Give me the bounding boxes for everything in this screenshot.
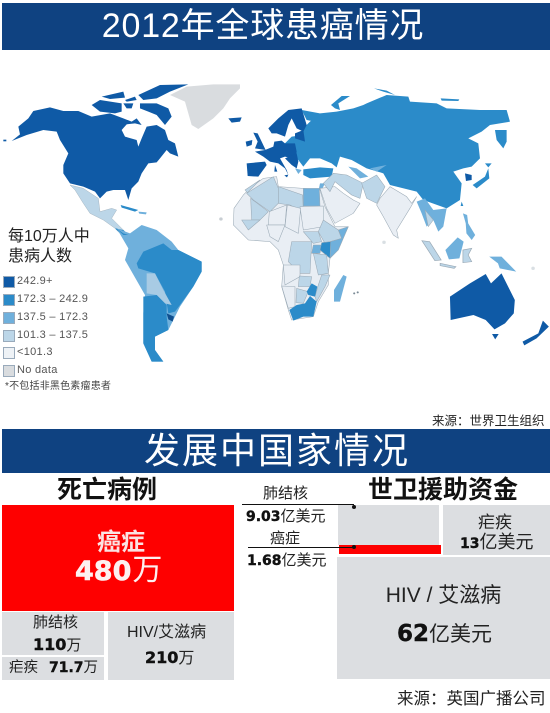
cell: HIV funding bbox=[337, 557, 550, 679]
cell: tuberculosis funding bbox=[338, 505, 439, 545]
map: Fiji bbox=[531, 267, 535, 270]
map: Greece bbox=[295, 168, 302, 174]
map: Cape Verde bbox=[219, 217, 223, 221]
map: Taiwan bbox=[461, 202, 463, 206]
legend item: <101.3 bbox=[3, 346, 53, 359]
map: Philippines bbox=[463, 213, 475, 240]
legend item: <101.3: <101.3 bbox=[17, 346, 53, 358]
map: Southeast Asia bbox=[417, 198, 447, 232]
cell: cancer deaths bbox=[2, 505, 234, 611]
map: New Guinea bbox=[489, 257, 516, 272]
map: Novaya Zemlya bbox=[331, 96, 350, 110]
cancer value: 480万 bbox=[75, 554, 162, 587]
callout value: 9.03亿美元 bbox=[246, 508, 326, 525]
HIV label: HIV/艾滋病 bbox=[127, 624, 206, 641]
map: Sumatra bbox=[422, 241, 441, 261]
cell: malaria deaths bbox=[2, 657, 104, 680]
HIV funding value: 62亿美元 bbox=[397, 621, 492, 647]
map: Asia-Pacific bbox=[219, 213, 549, 345]
map: India bbox=[377, 187, 417, 238]
callout dot bbox=[352, 545, 356, 549]
map: South Africa bbox=[289, 296, 317, 321]
HIV funding label: HIV / 艾滋病 bbox=[386, 584, 501, 607]
callout: tuberculosis funding bbox=[242, 485, 356, 525]
map: Finland region bbox=[302, 110, 320, 122]
legend item: 101.3 – 137.5: 101.3 – 137.5 bbox=[17, 329, 88, 341]
legend item: 172.3 – 242.9: 172.3 – 242.9 bbox=[17, 293, 88, 305]
map: Indian Ocean islands bbox=[353, 291, 359, 294]
map: Uganda bbox=[312, 245, 322, 253]
map: Cuba bbox=[121, 205, 138, 212]
callout label: 癌症 bbox=[270, 530, 300, 547]
map: Scandinavia bbox=[268, 108, 307, 137]
map: Mali bbox=[251, 198, 268, 220]
map: Ireland bbox=[246, 140, 252, 147]
title banner bbox=[2, 3, 550, 50]
cell: HIV deaths bbox=[108, 612, 234, 680]
map: Mexico bbox=[70, 185, 128, 237]
HIV value: 210万 bbox=[145, 648, 194, 667]
map: Zambia bbox=[298, 276, 312, 287]
malaria value: 71.7万 bbox=[49, 660, 98, 676]
map: continent base bbox=[117, 225, 202, 362]
map: Turkey bbox=[303, 167, 333, 178]
malaria label: 疟疾 bbox=[9, 660, 38, 676]
map: Europe bbox=[246, 108, 325, 192]
map: Niger bbox=[268, 205, 287, 225]
map: Tasmania bbox=[492, 334, 499, 339]
map: Japan bbox=[485, 163, 492, 167]
map: Balkans bbox=[285, 153, 298, 168]
map: Sulawesi bbox=[463, 248, 472, 263]
malaria funding label: 疟疾 bbox=[478, 513, 512, 532]
legend item: No data bbox=[3, 364, 58, 377]
map: Canada and USA bbox=[3, 84, 188, 200]
map: Australia bbox=[450, 273, 515, 329]
map: Afghanistan and Pakistan bbox=[362, 175, 385, 203]
map: Baltics bbox=[295, 130, 305, 142]
cell: malaria funding bbox=[443, 505, 550, 555]
map: Great Britain bbox=[253, 133, 266, 150]
map: Korea bbox=[465, 173, 472, 181]
map: Sardinia bbox=[274, 165, 277, 172]
map: Egypt bbox=[303, 188, 320, 206]
map: Libya bbox=[278, 187, 303, 212]
map: Greenland bbox=[170, 84, 240, 129]
map: Central Asia bbox=[348, 167, 368, 178]
cell: cancer funding bbox=[339, 545, 441, 554]
callout label: 肺结核 bbox=[263, 485, 308, 502]
title: 2012年全球患癌情况 bbox=[102, 7, 424, 45]
map: Uruguay bbox=[167, 313, 174, 322]
callout leader line bbox=[248, 547, 354, 548]
map: Mozambique bbox=[315, 275, 330, 302]
map: Africa base bbox=[233, 177, 348, 320]
world map bbox=[3, 84, 549, 362]
map: Eurasia bbox=[228, 88, 510, 208]
map: Botswana bbox=[296, 288, 308, 303]
map: Levant bbox=[318, 183, 325, 192]
map: Chad bbox=[285, 205, 301, 233]
map: Caribbean islands bbox=[138, 212, 147, 214]
deaths heading: 死亡病例 bbox=[57, 476, 157, 504]
map: Zimbabwe bbox=[307, 283, 317, 297]
map: Somalia bbox=[330, 227, 348, 258]
map: Nigeria bbox=[267, 225, 285, 242]
map source: 来源：世界卫生组织 bbox=[432, 410, 545, 429]
map: Iceland bbox=[228, 117, 242, 123]
map: Iran and Iraq bbox=[323, 173, 363, 198]
map: Western and Central Europe bbox=[255, 141, 297, 175]
map: Java bbox=[440, 263, 456, 268]
map: West Africa bbox=[242, 220, 260, 230]
legend item: 242.9+: 242.9+ bbox=[17, 275, 53, 287]
map: Arabia bbox=[320, 187, 360, 223]
map: South Sudan bbox=[303, 232, 322, 243]
treemap: deaths bbox=[2, 505, 234, 680]
map: Kamchatka bbox=[495, 130, 507, 148]
map: Middle East and South Asia bbox=[320, 165, 447, 238]
map: Africa bbox=[233, 177, 348, 321]
map: Borneo bbox=[445, 237, 464, 259]
map: Tanzania bbox=[313, 253, 328, 275]
map: Russia and China bbox=[283, 95, 510, 208]
aid heading: 世卫援助资金 bbox=[368, 476, 518, 504]
legend bbox=[3, 227, 111, 392]
legend item: 242.9+ bbox=[3, 275, 53, 288]
cell: tuberculosis deaths bbox=[2, 612, 104, 655]
tuberculosis label: 肺结核 bbox=[33, 614, 78, 631]
aid source: 来源：英国广播公司 bbox=[397, 685, 546, 709]
map: Brazil bbox=[137, 243, 202, 313]
malaria funding value: 13亿美元 bbox=[460, 532, 533, 552]
legend title: 每10万人中 bbox=[8, 228, 90, 245]
map: Spain bbox=[247, 162, 267, 177]
callout leader line bbox=[242, 504, 354, 505]
tuberculosis value: 110万 bbox=[33, 635, 81, 654]
legend title bbox=[8, 227, 90, 265]
map: Sri Lanka bbox=[382, 241, 386, 244]
legend item: 137.5 – 172.3: 137.5 – 172.3 bbox=[17, 311, 88, 323]
legend footnote: *不包括非黑色素瘤患者 bbox=[5, 381, 111, 392]
map: Namibia bbox=[282, 286, 295, 308]
map: Central America bbox=[115, 228, 128, 237]
legend title: 患病人数 bbox=[8, 248, 72, 265]
cancer label: 癌症 bbox=[97, 529, 145, 556]
map: North America bbox=[3, 84, 240, 237]
callout dot bbox=[352, 505, 356, 509]
map: Morocco bbox=[245, 180, 260, 193]
callout: cancer funding bbox=[247, 530, 356, 569]
treemap: aid funding bbox=[337, 505, 550, 679]
map: Angola bbox=[283, 265, 300, 285]
map: Argentina and Chile bbox=[143, 295, 168, 362]
map: DR Congo bbox=[288, 242, 312, 273]
map: Kenya bbox=[320, 242, 331, 258]
map: Thailand bbox=[425, 210, 433, 227]
legend item: No data: No data bbox=[17, 364, 58, 376]
map: Ethiopia bbox=[318, 220, 342, 243]
map: Ukraine and Belarus bbox=[293, 137, 315, 163]
developing countries banner bbox=[2, 429, 550, 473]
map: Madagascar bbox=[334, 275, 347, 302]
map: Central America tip bbox=[115, 227, 128, 235]
map: Arctic islands bbox=[374, 88, 395, 95]
map: Algeria bbox=[247, 177, 278, 212]
map: South America bbox=[115, 225, 202, 362]
map: Sicily bbox=[284, 175, 288, 177]
callout value: 1.68亿美元 bbox=[247, 552, 327, 569]
map: New Zealand bbox=[523, 321, 549, 345]
map: Sudan bbox=[300, 206, 323, 230]
map: Bolivia and Paraguay bbox=[147, 273, 172, 305]
section heading: 发展中国家情况 bbox=[144, 430, 410, 471]
